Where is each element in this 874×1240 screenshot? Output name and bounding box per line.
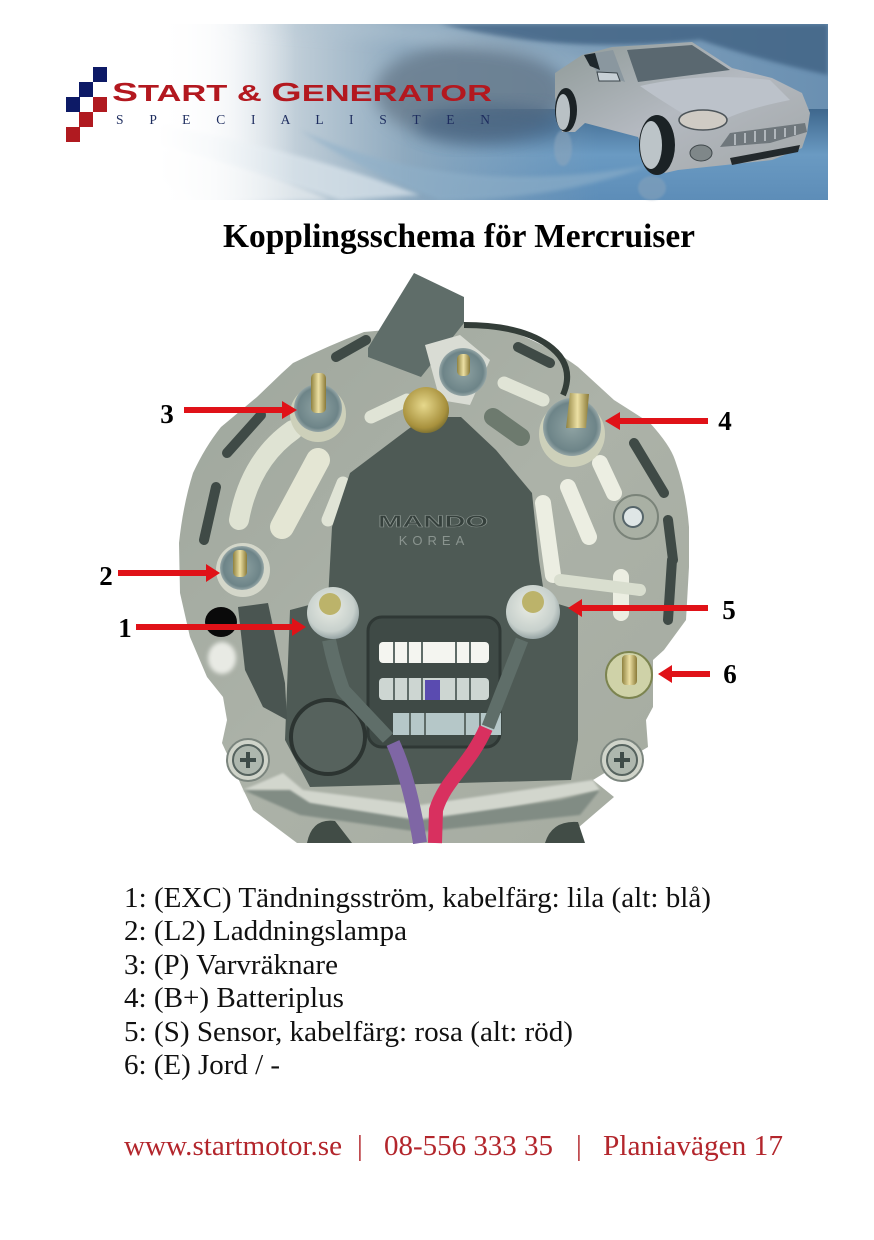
logo checker squares	[66, 67, 107, 142]
footer contact line: Planiavägen 17	[603, 1130, 783, 1162]
windshield	[627, 45, 730, 82]
arrow 3	[184, 401, 297, 419]
terminal numbers: 4	[718, 406, 732, 436]
arrow 1	[136, 618, 306, 636]
terminal numbers: 3	[160, 399, 174, 429]
arrow 6	[658, 665, 710, 683]
terminal legend: 2: (L2) Laddningslampa	[124, 916, 407, 947]
strap from terminal 2	[238, 603, 287, 720]
arrow 4	[605, 412, 708, 430]
lower screws	[227, 739, 643, 781]
mounting hole	[205, 607, 237, 637]
terminal 6	[606, 652, 652, 698]
terminal 1	[307, 587, 359, 639]
footer contact line	[124, 1130, 783, 1162]
arrows	[118, 401, 710, 683]
terminal numbers: 2	[99, 561, 113, 591]
arrow 2	[118, 564, 220, 582]
wire: red	[435, 640, 522, 843]
cooling slots	[204, 340, 673, 620]
cover lettering: MANDO	[378, 512, 488, 531]
terminal legend: 6: (E) Jord / -	[124, 1050, 280, 1081]
terminal 2	[216, 543, 270, 597]
top brass screw	[403, 387, 449, 433]
side window	[584, 50, 625, 82]
terminal 3	[290, 373, 346, 442]
ground bolt	[614, 495, 658, 539]
terminal legend: 1: (EXC) Tändningsström, kabelfärg: lila (alt: blå)	[124, 883, 711, 914]
footer contact line: |	[576, 1130, 582, 1162]
terminal legend: 4: (B+) Batteriplus	[124, 983, 344, 1014]
wire: purple	[329, 640, 420, 843]
terminal legend: 5: (S) Sensor, kabelfärg: rosa (alt: röd)	[124, 1017, 573, 1048]
icon: sports car	[554, 42, 810, 200]
banner background with swooshes	[155, 24, 828, 200]
terminal legend	[124, 883, 711, 1081]
rear wheel	[555, 88, 577, 132]
footer contact line: |	[357, 1130, 363, 1162]
lower housing highlights and shading	[243, 773, 600, 843]
round plug	[291, 700, 365, 774]
logo tagline: S P E C I A L I S T E N	[116, 112, 490, 127]
car reflections	[554, 130, 572, 166]
logo wordmark: S TART & G ENERATOR	[112, 77, 493, 107]
terminal numbers	[99, 399, 737, 689]
alternator photo	[179, 273, 689, 843]
terminal numbers: 6	[723, 659, 737, 689]
lower intake	[730, 145, 800, 165]
terminal 5	[506, 585, 560, 639]
footer contact line: 08-556 333 35	[384, 1130, 553, 1162]
capacitor	[368, 273, 464, 377]
footer contact line: www.startmotor.se	[124, 1130, 342, 1162]
regulator cover	[285, 417, 578, 787]
fog lamp	[690, 145, 712, 161]
alternator photo: KOREA	[399, 533, 469, 548]
alternator housing	[179, 323, 689, 843]
connector window	[368, 617, 501, 747]
terminal legend: 3: (P) Varvräknare	[124, 950, 338, 981]
headlight	[679, 110, 727, 130]
front wheel	[639, 115, 675, 175]
top nut	[425, 335, 490, 405]
terminal numbers: 1	[118, 613, 132, 643]
arrow 5	[568, 599, 708, 617]
header banner	[66, 24, 828, 200]
title: Kopplingsschema för Mercruiser	[223, 218, 695, 255]
capacitor wire	[464, 325, 567, 395]
terminal 4	[539, 393, 605, 467]
terminal numbers: 5	[722, 595, 736, 625]
car body	[555, 42, 810, 173]
grille	[720, 123, 807, 147]
